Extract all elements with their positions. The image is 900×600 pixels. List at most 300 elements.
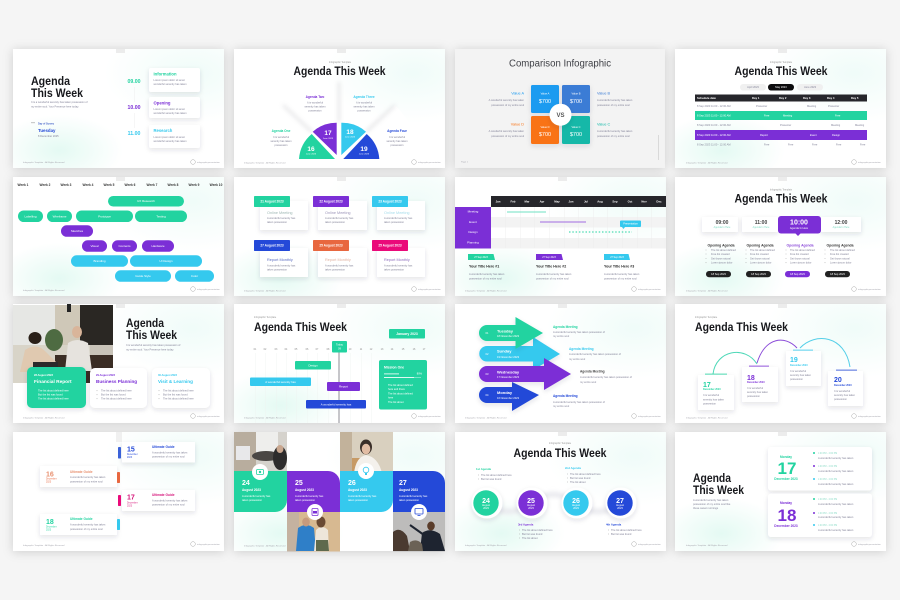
heading: Agenda This Week (254, 322, 348, 334)
card 18: December (46, 526, 57, 528)
date cards: December 2023 (703, 388, 721, 391)
wedge 19: June 2023 (359, 154, 370, 156)
timeline times: 10.00 (128, 105, 141, 111)
comparison squares: Value B (572, 92, 581, 96)
footer: Infographic Template - All Rights Reserved (244, 416, 286, 420)
action buttons: 18 Sep 2023 (751, 272, 766, 276)
card row 2: 27 August 2023 (260, 244, 284, 248)
footer (465, 287, 662, 292)
comparison squares: $700 (539, 99, 551, 105)
card 15 (118, 442, 195, 462)
circle 25 (516, 488, 548, 518)
cyan bars: UI Design (159, 259, 173, 263)
card: business planning: The list about defined here (101, 396, 132, 400)
day scale: 12 (370, 348, 373, 351)
agenda labels: Agenda One (272, 129, 291, 133)
day of survey block: Tuesday (38, 128, 56, 133)
tabs: June 2023 (804, 85, 817, 89)
schedule table: Free (835, 114, 841, 118)
agenda columns: Lorem ipsum dolor (711, 261, 733, 265)
agenda columns: Free list created (790, 252, 809, 256)
panel: 27 august: August 2023 (399, 488, 418, 492)
intro text: A wonderful serenity has taken (693, 498, 729, 502)
card: december 18 (768, 494, 872, 537)
small label: Infographic Template (329, 61, 352, 64)
arrows (713, 339, 850, 374)
value labels: possession of my entire soul (597, 103, 630, 107)
month header: Apr (540, 200, 545, 204)
agenda labels: Agenda Two (306, 95, 324, 99)
schedule table: Report (760, 133, 768, 137)
card 16: 2023 (46, 482, 52, 484)
slide 2: semi-circle agenda (234, 49, 445, 168)
footer: Infographic Template - All Rights Reserved (23, 161, 65, 164)
month header: May (554, 200, 560, 204)
footer (23, 414, 221, 420)
card row 1: 23 August 2023 (378, 200, 402, 204)
value labels: A wonderful serenity has taken (489, 98, 525, 102)
date cards (698, 350, 863, 410)
date cards: 19 (790, 357, 798, 364)
card: opening (149, 97, 200, 118)
card: research: Research (154, 128, 173, 133)
footer (465, 542, 662, 547)
agenda labels: possession (391, 143, 404, 147)
card: research: wonderful serenity has taken (154, 139, 187, 143)
footer: infographicpresentation (858, 288, 882, 291)
arrow labels: 17 November 2023 (497, 375, 520, 379)
card: business planning: The list about defined here (101, 388, 132, 392)
card row 2: 25 August 2023 (378, 244, 402, 248)
footer: infographicpresentation (638, 415, 662, 418)
card: business planning (90, 368, 147, 408)
day scale: 06 (306, 348, 309, 351)
slide 8: opening agenda columns (675, 177, 886, 296)
footer: infographicpresentation (638, 543, 662, 546)
value labels: possession of my entire soul (491, 103, 524, 107)
circle 26: 2023 (573, 506, 579, 510)
date cards: December 2023 (790, 364, 808, 367)
card: december 18: A wonderful serenity has taken (818, 502, 854, 506)
footer (244, 414, 442, 420)
slide 3: comparison infographic (455, 49, 665, 168)
card 17: 2023 (127, 506, 133, 508)
circle 27: 2023 (617, 506, 623, 510)
month header: Jun (569, 200, 574, 204)
card: december 17 (768, 447, 872, 490)
card row 2: taken possession (267, 268, 288, 272)
intro text (126, 343, 181, 352)
agenda notes: Agenda Meeting (569, 347, 594, 351)
card: financial report (27, 367, 86, 408)
card: december 17: 1:00 PM - 2:00 PM (818, 466, 837, 468)
card: visit and learning: 30 August 2023 (158, 373, 177, 377)
schedule table: Presenter (828, 104, 839, 108)
week headers: Week 5 (104, 183, 115, 187)
arrow labels: 19 November 2023 (497, 355, 520, 359)
footer (244, 287, 442, 292)
fan background (257, 82, 421, 159)
small label: Infographic Template (695, 316, 718, 319)
date tags and titles: Your Title Here #3 (604, 264, 634, 268)
card 18: 18 (46, 519, 54, 526)
month header: Jan (496, 200, 501, 204)
panel: 24 august: 24 (242, 480, 250, 487)
schedule table: Day 4 (827, 96, 835, 100)
agenda columns: Opening Agenda (826, 243, 854, 247)
heading: Agenda This Week (695, 322, 789, 334)
date tags and titles: 27 Sep 2023 (610, 256, 624, 259)
circle 24: 2023 (483, 506, 489, 510)
circle 26: 26 (572, 498, 580, 505)
footer: Infographic Template - All Rights Reserved (465, 290, 507, 292)
day scale: 16 (413, 348, 416, 351)
agenda notes: 1st Agenda (476, 467, 491, 471)
heading (31, 76, 84, 100)
agenda labels: possession (358, 108, 371, 112)
footer: Infographic Template - All Rights Reserved (244, 544, 286, 548)
panel: 25 august (287, 471, 340, 512)
comparison squares (531, 85, 590, 144)
agenda columns: Lorem ipsum dolor (750, 261, 772, 265)
green bars: Wireframe (53, 214, 67, 218)
schedule table: Day 5 (851, 96, 859, 100)
footer: infographicpresentation (638, 288, 662, 291)
small label: Infographic Template (770, 188, 793, 192)
schedule table: Free (788, 142, 794, 146)
footer: Infographic Template - All Rights Reserved (23, 289, 65, 292)
schedule table: Schedule date (697, 96, 716, 100)
wedge 19: 19 (360, 146, 368, 153)
panel: 24 august: taken possession (242, 498, 263, 502)
page number: Page 1 (461, 162, 469, 164)
action buttons: 18 Sep 2023 (711, 272, 726, 276)
footer: Infographic Template - All Rights Reserved (465, 416, 507, 420)
value labels: A wonderful serenity has taken (489, 129, 525, 133)
date cards: December 2023 (747, 381, 765, 384)
card 18: possession of my entire soul (70, 527, 103, 531)
agenda notes: But list was found (522, 532, 543, 536)
timeline times: 11.00 (128, 131, 140, 137)
row labels: Design (468, 230, 478, 234)
intro text: my entire soul. Your Presence here today. (31, 104, 79, 108)
footer: infographicpresentation (418, 415, 442, 418)
agenda notes: But list was found (570, 476, 591, 480)
agenda columns: The list about defined (711, 248, 736, 252)
timeline bars: Design (308, 364, 318, 368)
month header: Nov (641, 200, 647, 204)
day scale: 17 (423, 348, 426, 351)
tabs (740, 84, 823, 90)
value labels: Value D (511, 122, 524, 126)
date cards: 20 (834, 377, 842, 384)
purple bars: Hardware (151, 244, 165, 248)
card row 2 (254, 240, 425, 277)
week headers: Week 3 (61, 183, 72, 187)
slide 12: stepped dates with arcs (675, 304, 886, 423)
timeline times: 09.00 (128, 79, 141, 85)
card: business planning: Business Planning (96, 379, 137, 384)
card: research (149, 125, 200, 148)
card 18: A wonderful serenity has taken (70, 522, 106, 526)
agenda notes: A wonderful serenity has taken possession of (580, 375, 632, 379)
month tag (389, 329, 425, 338)
photo: two colleagues (287, 512, 340, 552)
card 15: 2023 (127, 457, 133, 459)
row labels: Event (469, 220, 477, 224)
wedge 18: June 2023 (345, 136, 356, 138)
agenda labels: It is wonderful (273, 135, 289, 139)
date cards: serenity has taken (703, 398, 725, 402)
agenda notes: A wonderful serenity has taken possession of (569, 352, 621, 356)
day scale: 03 (275, 348, 278, 351)
date tags and titles: Your Title Here #1 (469, 264, 499, 268)
arrow labels: 01 (486, 331, 489, 335)
panel: 25 august: 25 (295, 480, 303, 487)
wedge 18: 18 (346, 129, 354, 136)
panel: 27 august: 27 (399, 480, 407, 487)
card 18: Ultimate Guide (70, 517, 93, 521)
card: december 17: December 2023 (774, 477, 798, 481)
card: information: Information (154, 72, 177, 76)
green bars: Prototype (98, 214, 111, 218)
footer (686, 414, 882, 420)
green bars (18, 196, 187, 222)
week headers: Week 4 (83, 183, 94, 187)
circle 27: August (616, 503, 624, 507)
wedge 17: 17 (324, 130, 332, 137)
time cards: Agenda In Here (790, 226, 809, 230)
card: information: Lorem ipsum dolor sit amet (154, 78, 185, 82)
month header (491, 196, 666, 207)
footer: infographicpresentation (197, 415, 221, 418)
small label: Infographic Template (254, 316, 277, 319)
card 17: Ultimate Guide (152, 493, 175, 497)
comparison squares: Value D (540, 125, 550, 129)
card row 2: Report Monthly (325, 258, 351, 262)
value labels (489, 92, 633, 138)
card: financial report: 28 August 2023 (34, 373, 53, 377)
agenda columns: Free list created (750, 252, 769, 256)
panel: 27 august: A wonderful serenity has (399, 494, 428, 498)
arrow: sunday (479, 337, 560, 370)
photo: presentation audience (393, 512, 445, 552)
agenda labels: serenity has taken (353, 104, 375, 108)
agenda columns: Set those natural (830, 256, 850, 260)
panel: 27 august: taken possession (399, 498, 420, 502)
mission card: The list about (388, 400, 404, 404)
footer: infographicpresentation (197, 288, 221, 291)
agenda notes: A wonderful serenity has taken possession of (553, 330, 605, 334)
arrow: tuesday (479, 317, 543, 349)
agenda columns: Opening Agenda (746, 243, 774, 247)
panel: 26 august: 26 (348, 480, 356, 487)
slide 1: agenda with times (13, 49, 224, 168)
card: december 17: A wonderful serenity has taken (818, 456, 854, 460)
panel: 25 august: taken possession (295, 498, 316, 502)
small label: Infographic Template (549, 442, 572, 445)
card: december 17: A wonderful serenity has taken (818, 482, 854, 486)
footer (465, 414, 662, 420)
week headers (18, 183, 223, 187)
date tags and titles (468, 254, 640, 280)
date cards: possession (703, 402, 717, 406)
card: december 18: 1:00 PM - 2:00 PM (818, 513, 837, 515)
task bars (507, 212, 632, 232)
card 16: A wonderful serenity has taken (70, 475, 106, 479)
week headers: Week 7 (147, 183, 158, 187)
panel: 24 august: August 2023 (242, 488, 261, 492)
panel: 26 august (340, 471, 393, 512)
circle 27: 27 (616, 498, 624, 505)
footer (244, 160, 442, 164)
card row 2: Report Monthly (267, 258, 293, 262)
day scale: 08 (327, 348, 330, 351)
icon: monitor (411, 504, 427, 520)
mission card: Mission One (384, 366, 404, 370)
agenda labels: possession (309, 108, 322, 112)
card: visit and learning: But the list was found (163, 392, 188, 396)
mission card: here and there (388, 387, 405, 391)
heading: Agenda This Week (514, 448, 607, 460)
icon: document (307, 504, 323, 520)
date tags and titles: Your Title Here #2 (536, 264, 566, 268)
footer: infographicpresentation (197, 161, 221, 164)
footer: infographicpresentation (858, 415, 882, 418)
footer (23, 542, 221, 547)
callout: Presentation (623, 222, 638, 226)
schedule table: Free (836, 142, 842, 146)
card row 1: taken possession (267, 220, 288, 224)
heading: This Week (31, 88, 84, 100)
agenda notes: my entire soul (569, 357, 586, 361)
day of survey block (31, 122, 59, 138)
green bars: Testing (156, 214, 166, 218)
wedge 17: June 2023 (323, 138, 334, 140)
wedge 17 (313, 123, 337, 155)
card: december 17: 17 (778, 459, 796, 478)
schedule table: 8 Sep 2023 11:00 - 12:00 AM (697, 133, 731, 137)
month header: Aug (597, 200, 603, 204)
agenda labels: It is wonderful (307, 100, 323, 104)
month header: Oct (628, 200, 632, 204)
arrow labels (486, 328, 520, 400)
agenda notes: Agenda Meeting (553, 325, 578, 329)
card row 2: Report Monthly (384, 258, 410, 262)
week headers: Week 8 (168, 183, 179, 187)
agenda labels: It is wonderful (356, 100, 372, 104)
heading: Agenda (31, 76, 71, 88)
time cards: Agenda In Here (833, 226, 850, 229)
comparison squares: Value A (541, 92, 550, 96)
date cards: 18 (747, 375, 755, 382)
schedule table: Presenter (780, 123, 791, 127)
agenda notes: Agenda Meeting (553, 394, 578, 398)
wedge 16 (299, 134, 335, 159)
day scale: 07 (316, 348, 319, 351)
footer (686, 542, 882, 547)
time cards: 12:00 (835, 220, 848, 226)
agenda notes: The list about defined here (481, 473, 512, 477)
time cards: Agenda In Here (753, 226, 770, 229)
agenda columns: Free list created (830, 252, 849, 256)
row labels (455, 207, 491, 248)
circle 26 (562, 488, 592, 518)
schedule table: Free (764, 142, 770, 146)
panel: 26 august: August 2023 (348, 488, 367, 492)
panel: 26 august: taken possession (348, 498, 369, 502)
date cards: possession (834, 397, 848, 401)
date cards: possession (790, 377, 804, 381)
time cards: 09:00 (716, 220, 729, 226)
wedge 16: June 2023 (306, 154, 317, 156)
week headers: Week 9 (189, 183, 200, 187)
agenda columns: Opening Agenda (708, 243, 735, 247)
card row 1: 21 August 2023 (260, 200, 284, 204)
card row 1 (254, 196, 425, 230)
heading (693, 473, 745, 497)
agenda columns: Free list created (711, 252, 730, 256)
card 16: possession of my entire soul (70, 480, 103, 484)
intro text: these sweet mornings (693, 506, 719, 510)
card row 1: A wonderful serenity has (267, 216, 296, 220)
card row 1: A wonderful serenity has (325, 216, 354, 220)
footer: infographicpresentation (418, 161, 442, 164)
vs badge: VS (556, 113, 565, 119)
connector wave (486, 494, 620, 512)
value labels: Value B (597, 92, 610, 96)
circle 24 (472, 488, 502, 518)
timeline bars: A wonderful serenity has (265, 380, 296, 384)
timeline bars: A wonderful serenity has (321, 402, 352, 406)
agenda notes: 4th Agenda (606, 522, 622, 526)
footer: Infographic Template - All Rights Reserved (686, 544, 728, 547)
agenda notes: The list about defined here (570, 472, 601, 476)
date tags and titles: possession of my entire soul (536, 276, 569, 280)
value labels: possession of my entire soul (491, 134, 524, 138)
mission card: here (388, 396, 394, 400)
agenda labels: It is wonderful (389, 135, 405, 139)
panel: 26 august: A wonderful serenity has (348, 494, 377, 498)
day scale: 01 (254, 348, 257, 351)
agenda labels: serenity has taken (304, 104, 326, 108)
intro text: It is wonderful serenity has taken possession of (126, 343, 181, 347)
schedule table: Meeting (831, 123, 841, 127)
agenda columns: Set those natural (790, 256, 810, 260)
intro text: It is a wonderful serenity has taken possession of (31, 100, 88, 104)
arrow labels: 02 (486, 352, 489, 356)
date cards: serenity has taken (790, 373, 812, 377)
agenda notes: But list was found (481, 477, 502, 481)
footer: infographicpresentation (858, 161, 882, 164)
slide 11: arrow agenda (455, 304, 666, 423)
footer: infographicpresentation (197, 543, 221, 546)
date tags and titles: possession of my entire soul (469, 276, 502, 280)
card: financial report: Financial Report (34, 379, 72, 385)
card: december 18: December 2023 (774, 524, 798, 528)
tabs: May 2023 (775, 85, 787, 89)
action buttons (706, 271, 850, 277)
card: december 17: Monday (780, 455, 792, 459)
agenda columns (706, 243, 855, 265)
green bars: Labelling (24, 214, 37, 218)
month header: Feb (511, 200, 516, 204)
arrow labels: 04 (486, 393, 489, 397)
week headers: Week 2 (40, 183, 51, 187)
tabs: April 2023 (747, 85, 759, 89)
agenda notes (476, 466, 642, 540)
intro text: possession of my entire soul like (693, 502, 731, 506)
